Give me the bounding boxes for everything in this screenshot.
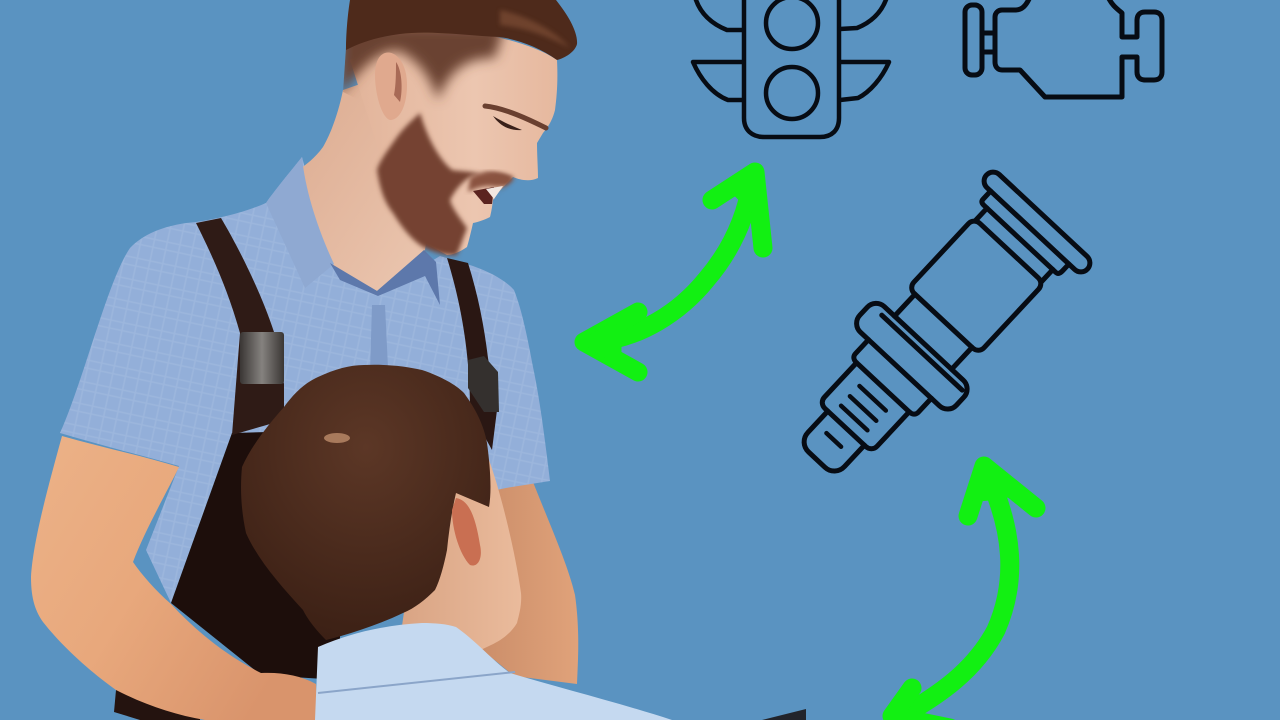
neck	[298, 70, 440, 291]
seated customer	[241, 365, 672, 720]
standing mechanic	[31, 0, 578, 720]
apron right strap	[447, 258, 497, 450]
hair	[346, 0, 577, 60]
eyebrow	[485, 106, 546, 128]
customer collar line	[318, 672, 515, 693]
hair highlight	[500, 10, 570, 48]
mouth	[473, 187, 494, 204]
shirt placket	[370, 305, 388, 372]
icon: engine	[965, 0, 1162, 97]
icon: spark plug	[766, 168, 1094, 506]
customer neck	[400, 440, 521, 655]
customer shirt	[315, 623, 672, 720]
face	[350, 29, 557, 255]
moustache	[468, 172, 514, 192]
beard	[377, 113, 513, 255]
mechanic shirt	[60, 157, 550, 603]
customer ear	[452, 498, 481, 566]
mechanic left arm and hand	[31, 436, 318, 720]
collar shadow	[330, 250, 440, 305]
arrow: double-headed green arrow lower	[892, 466, 1036, 720]
mechanic right arm	[470, 482, 578, 684]
customer hair	[241, 365, 490, 640]
apron bib	[171, 430, 340, 680]
collar left	[266, 157, 334, 288]
teeth	[486, 186, 503, 199]
strap buckles	[240, 332, 499, 412]
hair fade	[340, 25, 505, 100]
ear inner shadow	[394, 62, 402, 102]
icon: traffic light	[693, 0, 889, 137]
arrow: double-headed green arrow upper	[584, 172, 763, 372]
tablet corner	[762, 709, 806, 720]
apron left strap	[196, 218, 284, 435]
hair crown highlight	[324, 433, 350, 443]
apron lower left piece	[114, 690, 200, 720]
ear	[375, 53, 407, 120]
eye	[493, 116, 522, 130]
